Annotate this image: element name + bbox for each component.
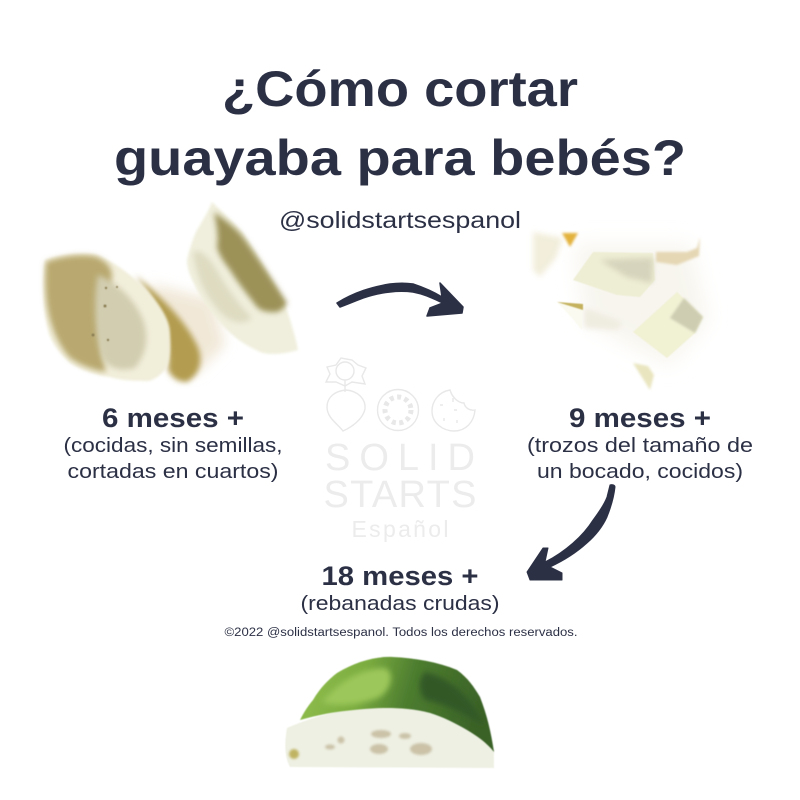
age label: 18 months: (rebanadas crudas) [300,592,500,615]
seeds [289,730,432,759]
arrow: 9 months to 18 months [527,485,615,580]
age label: 9 months: un bocado, cocidos) [537,460,743,483]
age label: 18 months: 18 meses + [322,561,478,591]
soft shadow [575,245,708,365]
small pale piece with seed [533,232,563,277]
logo wordmark: STARTS [324,474,476,516]
bottom sliver [633,363,654,390]
age label: 6 months: (cocidas, sin semillas, [64,434,282,457]
age label: 9 months [527,403,753,483]
large piece [573,252,655,297]
speckles [92,286,118,341]
age label: 6 months: cortadas en cuartos) [68,460,278,483]
title: ¿Cómo cortar [222,61,578,117]
icon: sliced vegetable [378,390,418,430]
logo wordmark: Español [352,516,448,542]
icon: beet [326,358,366,431]
logo wordmark: SOLID [325,437,475,479]
rind of left quarter [135,275,200,382]
title: guayaba para bebés? [114,130,686,186]
right quarter body [187,202,298,354]
copyright notice: ©2022 @solidstartsespanol. Todos los derechos reservados. [224,627,578,639]
age label: 9 months: (trozos del tamaño de [527,434,753,457]
age label: 18 months [300,561,500,615]
photo: raw guava slice [285,657,494,768]
age label: 6 months [64,403,282,483]
flesh [285,706,494,768]
soft shadow [150,283,225,375]
icon: cookie [432,390,475,431]
age label: 9 months: 9 meses + [569,403,711,433]
social handle: @solidstartsespanol [279,207,521,233]
small triangle piece [584,307,622,330]
stem [656,237,700,265]
green skin [300,657,494,752]
left quarter body [43,254,170,381]
photo: cooked guava quarters [43,202,298,382]
angled piece [633,292,703,358]
title [114,61,686,186]
arrow: 6 months to 9 months [337,283,463,316]
photo: bite-sized cooked guava pieces [533,232,708,390]
age label: 6 months: 6 meses + [102,403,244,433]
logo wordmark [324,437,476,542]
watermark logo: Solid Starts Español [324,358,476,542]
